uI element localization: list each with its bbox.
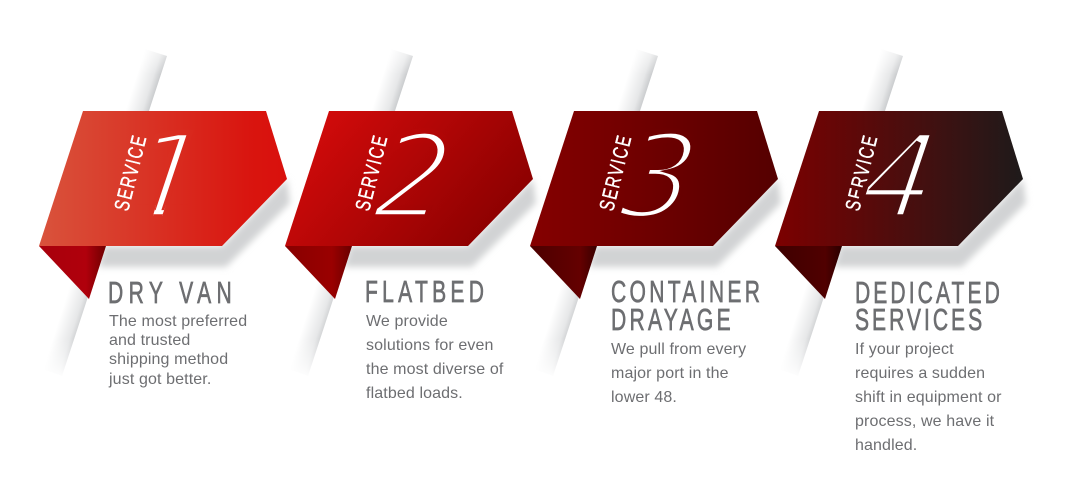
ribbon fold 2 xyxy=(285,246,352,299)
ribbon fold 3 xyxy=(530,246,597,299)
description 2: the most diverse of xyxy=(366,361,504,378)
ribbon shadow 1 xyxy=(98,179,290,267)
description 4: shift in equipment or xyxy=(855,389,1002,406)
number 2: 2 xyxy=(367,111,460,245)
description 4: process, we have it xyxy=(855,413,995,430)
ribbon fold 1 xyxy=(39,246,106,299)
description 2: flatbed loads. xyxy=(366,385,463,402)
description 1: and trusted xyxy=(109,332,190,349)
ribbon shadow 2 xyxy=(344,179,536,267)
description 1: The most preferred xyxy=(109,313,247,330)
description 1 xyxy=(108,313,247,388)
ribbon banner 4 xyxy=(775,111,1023,246)
diagonal stripe 1 xyxy=(57,52,167,370)
heading: dedicated services: SERVICES xyxy=(855,302,982,337)
description 3: major port in the xyxy=(611,365,729,382)
number 3: 3 xyxy=(613,111,706,245)
ribbon banner 1 xyxy=(39,111,287,246)
service label 4: SERVICE xyxy=(840,131,882,213)
description 2: We provide xyxy=(366,313,448,330)
heading: dry van: DRY VAN xyxy=(108,275,232,310)
ribbon banner 3 xyxy=(530,111,778,246)
description 3: lower 48. xyxy=(611,389,677,406)
diagonal stripe 4 xyxy=(793,52,903,370)
description 4: requires a sudden xyxy=(855,365,985,382)
description 2 xyxy=(366,313,504,402)
number 4: 4 xyxy=(853,111,946,245)
heading: container drayage: CONTAINER xyxy=(611,274,760,309)
ribbon banner 2 xyxy=(285,111,533,246)
description 3: We pull from every xyxy=(611,341,746,358)
description 4 xyxy=(855,341,1002,454)
ribbon shadow 4 xyxy=(834,179,1026,267)
panel: service 2 flatbed xyxy=(285,49,536,402)
description 1: shipping method xyxy=(109,351,228,368)
description 1: just got better. xyxy=(108,371,211,388)
heading: container drayage: DRAYAGE xyxy=(611,302,731,337)
heading: dedicated services: DEDICATED xyxy=(855,275,1000,310)
diagonal stripe 2 xyxy=(303,52,413,370)
diagonal stripe 3 xyxy=(548,52,658,370)
description 4: If your project xyxy=(855,341,954,358)
description 3 xyxy=(611,341,746,406)
description 2: solutions for even xyxy=(366,337,494,354)
panel: service 4 dedicated services xyxy=(775,49,1026,454)
service label 1: SERVICE xyxy=(109,131,151,213)
number 1: 1 xyxy=(122,111,215,245)
panel: service 1 dry van xyxy=(39,49,290,388)
heading: dedicated services xyxy=(855,275,1000,337)
service label 3: SERVICE xyxy=(594,131,636,213)
service label 2: SERVICE xyxy=(350,131,392,213)
heading: flatbed: FLATBED xyxy=(365,274,484,309)
ribbon shadow 3 xyxy=(589,179,781,267)
ribbon fold 4 xyxy=(775,246,842,299)
panel: service 3 container drayage xyxy=(530,49,781,406)
heading: container drayage xyxy=(611,274,760,337)
description 4: handled. xyxy=(855,437,917,454)
